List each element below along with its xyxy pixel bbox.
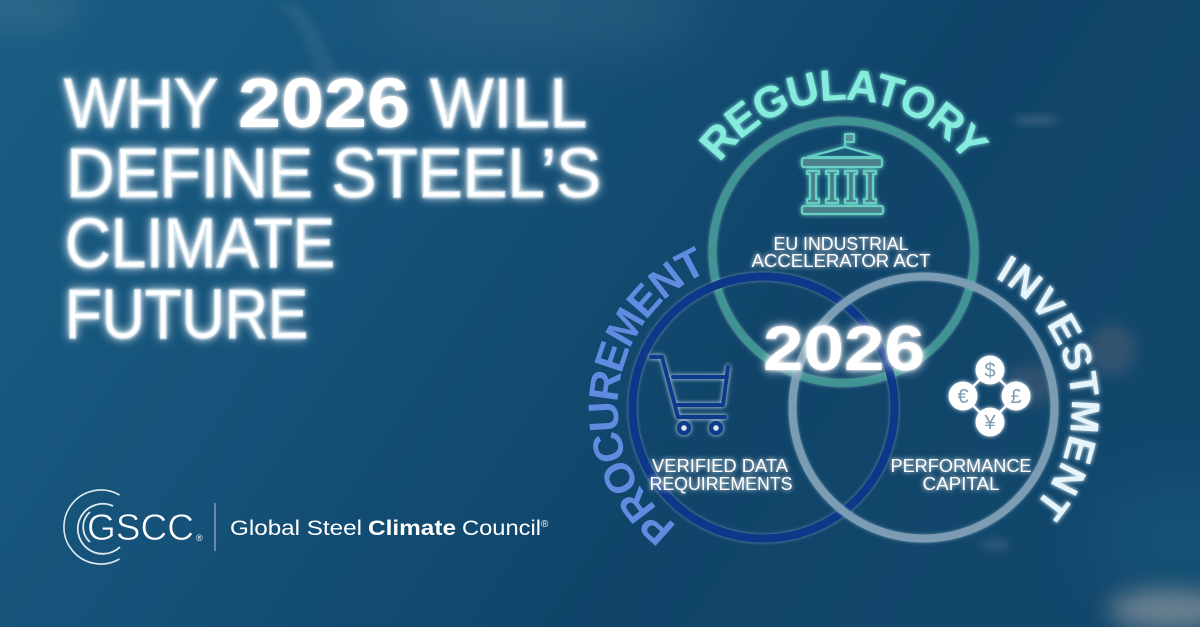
title: FUTURE xyxy=(65,275,308,353)
circle: procurement xyxy=(632,276,894,538)
council name: Council xyxy=(462,516,541,540)
council name: Climate xyxy=(368,516,456,540)
icon: government building xyxy=(802,134,883,214)
title: WILL xyxy=(430,64,587,142)
registered mark: ® xyxy=(196,533,203,543)
curved label: procurement: PROCUREMENT xyxy=(588,246,700,546)
text: Verified Data Requirements: REQUIREMENTS xyxy=(650,474,792,494)
yen coin: ¥ xyxy=(983,412,996,434)
center year: 2026 xyxy=(763,314,925,384)
title xyxy=(64,64,601,353)
title: 2026 xyxy=(238,64,410,142)
curved label: investment: INVESTMENT xyxy=(994,252,1103,526)
title: CLIMATE xyxy=(65,204,335,282)
dollar coin: $ xyxy=(984,360,996,382)
text: EU Industrial Accelerator Act xyxy=(752,234,931,271)
circle: investment xyxy=(792,276,1054,538)
circle: regulatory xyxy=(712,121,974,383)
curved label: regulatory: REGULATORY xyxy=(696,67,992,163)
logo divider xyxy=(214,503,216,551)
text: Performance Capital xyxy=(890,456,1032,494)
logo: Global Steel Climate Council xyxy=(64,490,549,564)
text: EU Industrial Accelerator Act: ACCELERATOR ACT xyxy=(752,251,931,271)
pound coin: £ xyxy=(1010,386,1022,408)
text: Performance Capital: CAPITAL xyxy=(922,474,1000,494)
venn diagram xyxy=(588,67,1103,546)
icon: currencies xyxy=(948,356,1030,436)
text: Performance Capital: PERFORMANCE xyxy=(890,456,1032,476)
title: WHY xyxy=(64,64,218,142)
icon: shopping cart xyxy=(651,357,728,433)
text: Verified Data Requirements: VERIFIED DATA xyxy=(652,456,788,476)
euro coin: € xyxy=(957,386,969,408)
council name: ® xyxy=(541,519,549,530)
text: EU Industrial Accelerator Act: EU INDUSTRIAL xyxy=(774,234,908,254)
council name: Global Steel xyxy=(230,516,362,540)
council name xyxy=(230,516,549,540)
logo rings xyxy=(64,490,120,564)
logo wordmark: GSCC xyxy=(87,507,194,548)
title: DEFINE STEEL’S xyxy=(66,134,601,212)
text: Verified Data Requirements xyxy=(650,456,792,494)
